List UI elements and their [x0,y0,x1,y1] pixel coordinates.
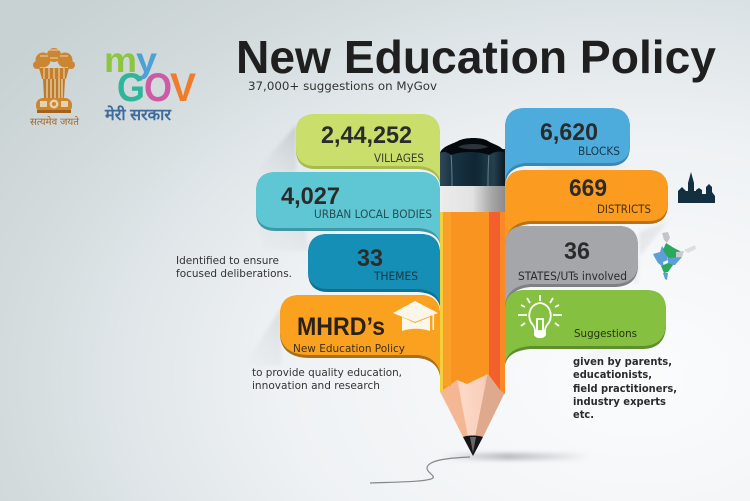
panel: villages [296,114,440,184]
pencil [440,138,505,456]
villages label: VILLAGES [374,151,424,165]
icon: graduation cap [393,301,438,331]
note: given by: industry experts [573,395,666,408]
suggestions label: Suggestions [574,327,637,340]
note: quality education: innovation and research [252,379,380,392]
panel long shadows [245,125,668,365]
states label: STATES/UTs involved [518,269,627,283]
MHRD label: New Education Policy [293,342,405,355]
blocks value: 6,620 [540,119,598,146]
states value: 36 [564,238,590,265]
icon: light bulb [518,295,562,337]
logo word: GOV: V [170,66,196,110]
note: given by: given by parents, [573,355,672,368]
themes value: 33 [357,245,383,272]
pencil body [440,210,505,394]
note: given by: educationists, [573,368,652,381]
urban label: URBAN LOCAL BODIES [314,207,432,221]
note: given by [573,355,677,421]
panel: MHRD [280,295,440,376]
panel: blocks [505,108,630,185]
panel: suggestions [505,290,666,365]
icon: city skyline [678,172,715,203]
logo word: GOV: G [117,66,145,110]
note: identified: focused deliberations. [176,268,292,280]
title: New Education Policy [236,31,716,83]
note: quality education: to provide quality education, [252,366,402,379]
note: given by: etc. [573,408,594,421]
note: quality education [252,366,402,392]
logo word: GOV: O [144,66,172,110]
panel: districts [505,170,668,245]
pencil ferrule [440,186,505,212]
panel: urban local bodies [256,172,440,244]
urban value: 4,027 [281,183,340,210]
note: given by: field practitioners, [573,382,677,395]
logo word: my: y [136,41,158,80]
icon: national emblem [30,48,79,128]
districts value: 669 [569,175,607,202]
logo tagline: मेरी सरकार [104,105,172,124]
themes label: THEMES [373,269,418,283]
subtitle: 37,000+ suggestions on MyGov [248,79,437,93]
note: identified: Identified to ensure [176,255,279,267]
MHRD heading: MHRD’s [297,313,385,341]
logo word: my: m [104,41,137,80]
villages value: 2,44,252 [321,122,412,149]
note: identified [176,255,292,280]
districts label: DISTRICTS [597,202,651,216]
pencil shadow and scribble [370,453,590,483]
logo word: GOV [117,66,196,110]
logo: MyGov [104,41,196,124]
pencil tip wood [440,372,505,456]
panel: states [505,226,638,308]
panel: themes [308,234,440,307]
emblem motto: सत्यमेव जयते [30,116,79,128]
blocks label: BLOCKS [578,144,620,158]
pencil eraser cap [440,138,505,186]
logo word: my [104,41,158,80]
icon: india map [653,232,696,280]
